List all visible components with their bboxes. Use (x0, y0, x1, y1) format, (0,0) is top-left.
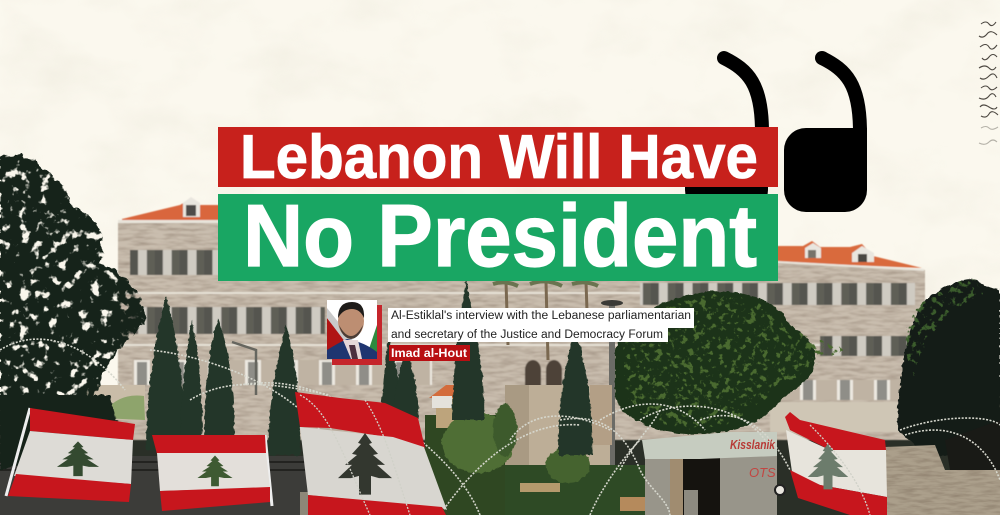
left tree (0, 154, 146, 425)
cypress trees (146, 280, 592, 455)
guard post with graffiti: Kisslanik (730, 437, 776, 452)
centre tree (615, 291, 848, 434)
calligraphy decoration top right (979, 22, 998, 144)
walls (118, 222, 925, 440)
window row three (132, 360, 432, 385)
central garden, stone terraces (425, 385, 645, 515)
base ground behind the scene (0, 395, 1000, 515)
flag three (295, 392, 447, 515)
flag two (152, 435, 272, 511)
guard post with graffiti: OTS (749, 465, 776, 480)
left dark lower area and fence (0, 385, 430, 515)
flag one (6, 408, 135, 502)
roof (122, 199, 240, 222)
flag four (785, 412, 887, 515)
presidential palace building (118, 197, 925, 440)
palm trunks and lamp post (232, 281, 623, 515)
name label: Imad al-Hout (391, 346, 467, 360)
interview description: and secretary of the Justice and Democracy Forum (391, 329, 663, 341)
window row one right (640, 283, 915, 305)
razor wire (0, 339, 1000, 515)
opening quotation mark icon (685, 51, 867, 212)
right stone wall (885, 420, 1000, 515)
title: green banner: No President (243, 186, 757, 285)
wire over flags (300, 395, 870, 515)
right tree (897, 278, 1000, 458)
title: red banner: Lebanon Will Have (240, 123, 758, 192)
interview description: Al-Estiklal's interview with the Lebanese parliamentarian (391, 310, 691, 322)
window row one left (130, 250, 220, 275)
left tree solid core (0, 395, 120, 470)
window row two (130, 307, 325, 334)
interview description (388, 308, 694, 342)
portrait of Imad al-Hout (327, 300, 382, 365)
guard post with graffiti (642, 432, 785, 515)
